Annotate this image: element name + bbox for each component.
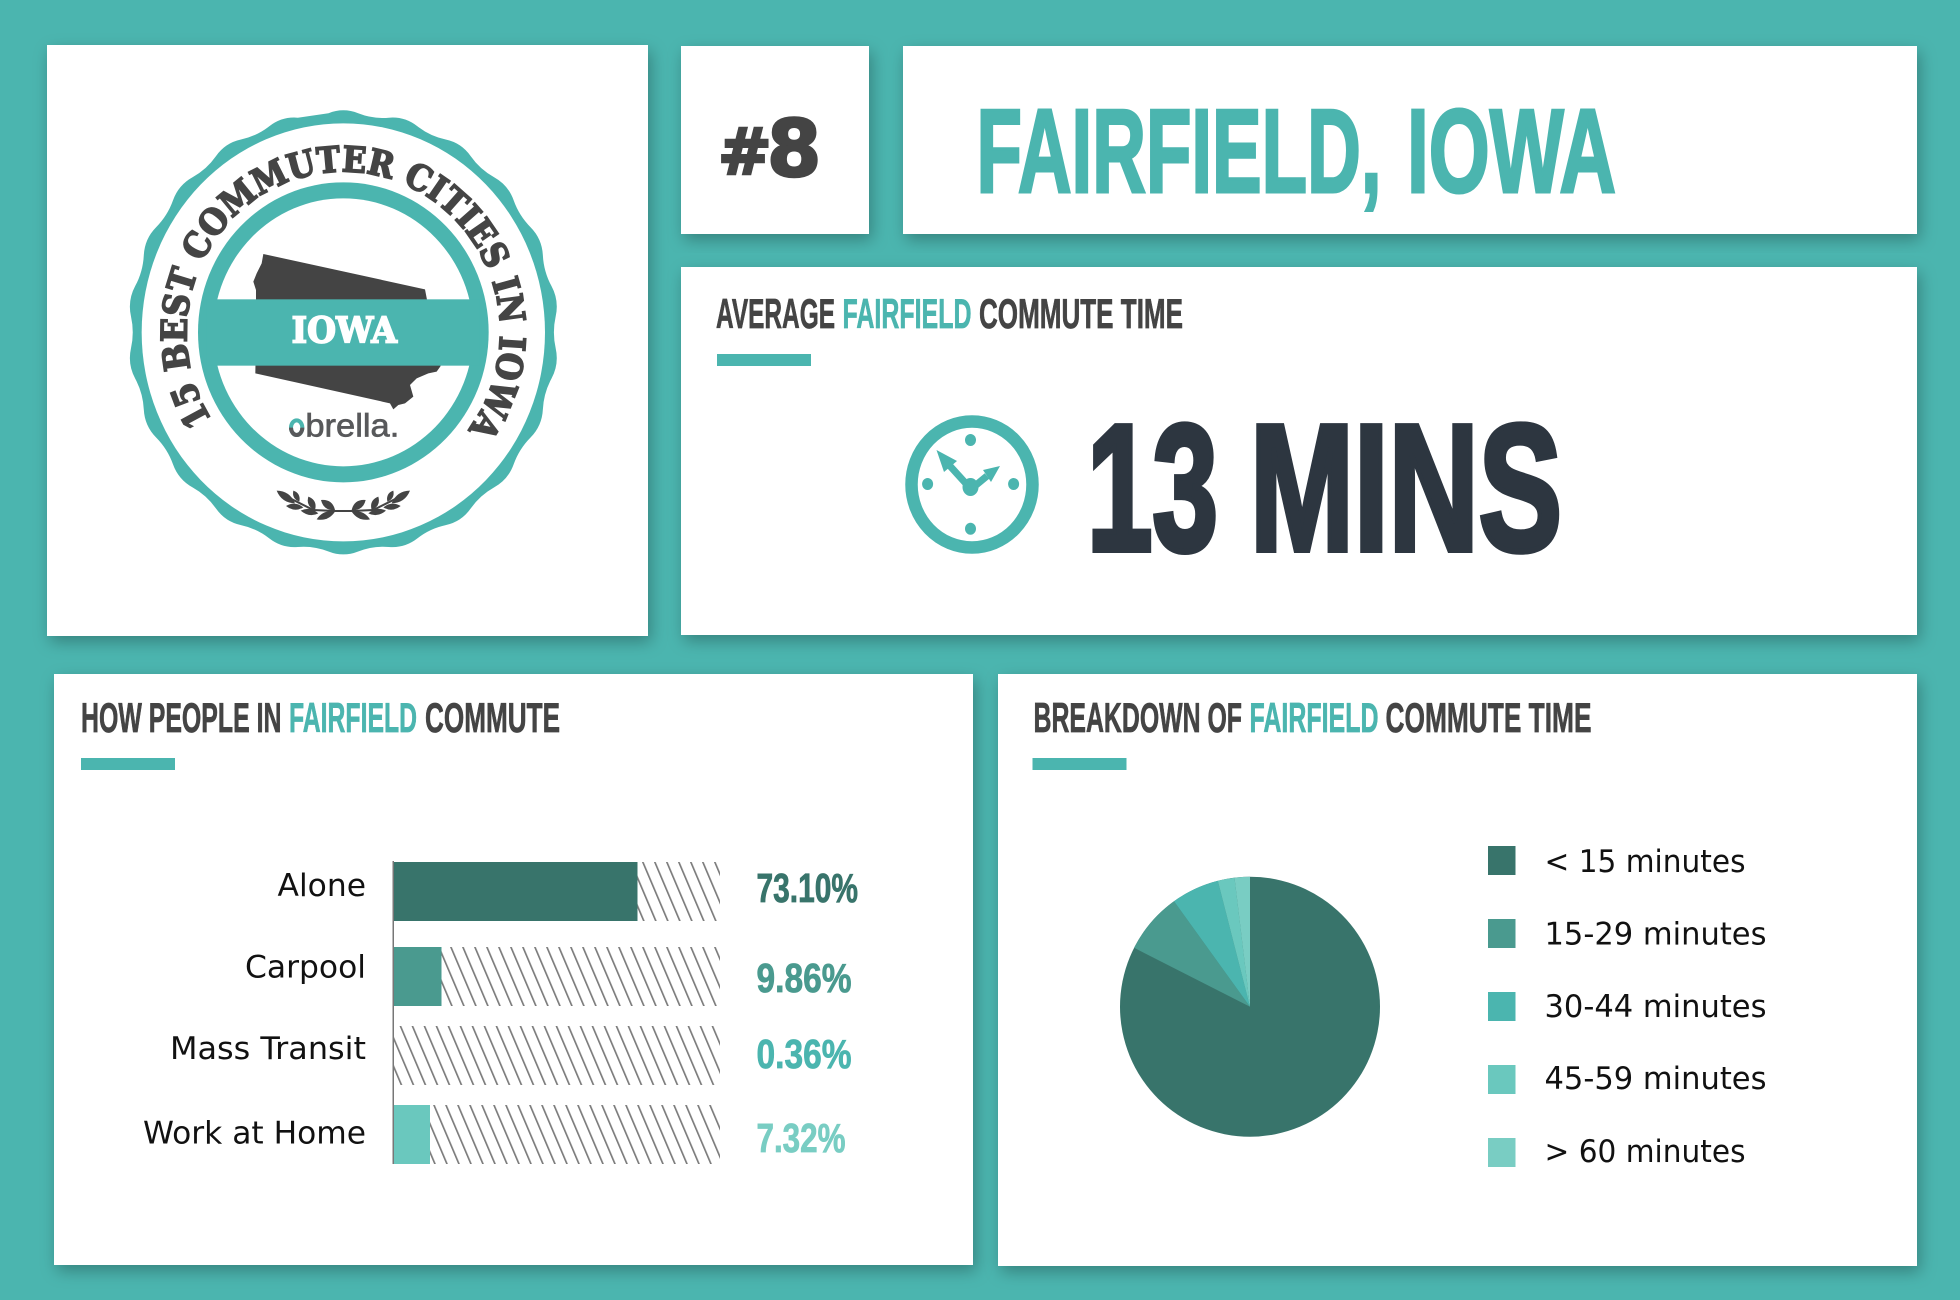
bar chart: Mass Transit bbox=[170, 1031, 366, 1067]
heading: FAIRFIELD bbox=[842, 290, 972, 337]
panel: rank bbox=[681, 46, 869, 234]
heading: AVERAGE bbox=[716, 290, 835, 337]
icon: clock bbox=[912, 422, 1032, 548]
legend: > 60 minutes bbox=[1544, 1134, 1746, 1170]
icon: commuter cities badge: IOWA bbox=[292, 310, 398, 351]
bar chart: 0.36% bbox=[756, 1031, 852, 1077]
panel: average commute time bbox=[681, 267, 1917, 635]
legend: < 15 minutes bbox=[1544, 844, 1746, 880]
heading: COMMUTE TIME bbox=[979, 290, 1183, 337]
bar chart: Alone bbox=[278, 868, 366, 904]
heading: COMMUTE bbox=[425, 694, 560, 741]
heading: BREAKDOWN OF bbox=[1034, 694, 1242, 741]
heading: HOW PEOPLE IN bbox=[81, 694, 282, 741]
heading: FAIRFIELD bbox=[289, 694, 417, 741]
legend bbox=[1488, 844, 1766, 1170]
panel: badge bbox=[42, 44, 658, 650]
heading: COMMUTE TIME bbox=[1386, 694, 1592, 741]
panel: commute time breakdown bbox=[998, 674, 1917, 1266]
icon: commuter cities badge bbox=[130, 110, 557, 554]
legend: 30-44 minutes bbox=[1544, 989, 1766, 1025]
bar chart: Carpool bbox=[245, 950, 366, 986]
big commute time value: 13 bbox=[1087, 388, 1218, 589]
rank number: 8 bbox=[767, 105, 821, 195]
heading: FAIRFIELD bbox=[1250, 694, 1378, 741]
bar chart: 73.10% bbox=[756, 865, 858, 911]
pie chart bbox=[1120, 877, 1380, 1137]
title: FAIRFIELD, bbox=[976, 85, 1382, 218]
title: IOWA bbox=[1407, 85, 1616, 218]
panel: how people commute bbox=[54, 674, 973, 1265]
legend: 45-59 minutes bbox=[1544, 1061, 1766, 1097]
icon: commuter cities badge: 15 BEST COMMUTER CITIES IN IOWA bbox=[160, 144, 527, 436]
bar chart bbox=[143, 861, 858, 1164]
icon: commuter cities badge: brella. bbox=[305, 407, 399, 444]
bar chart: 7.32% bbox=[756, 1115, 846, 1161]
panel: city title bbox=[903, 46, 1917, 234]
bar chart: Work at Home bbox=[143, 1116, 366, 1152]
legend: 15-29 minutes bbox=[1544, 916, 1766, 952]
big commute time value: MINS bbox=[1250, 388, 1562, 589]
rank number: # bbox=[718, 116, 772, 190]
bar chart: 9.86% bbox=[756, 955, 852, 1001]
